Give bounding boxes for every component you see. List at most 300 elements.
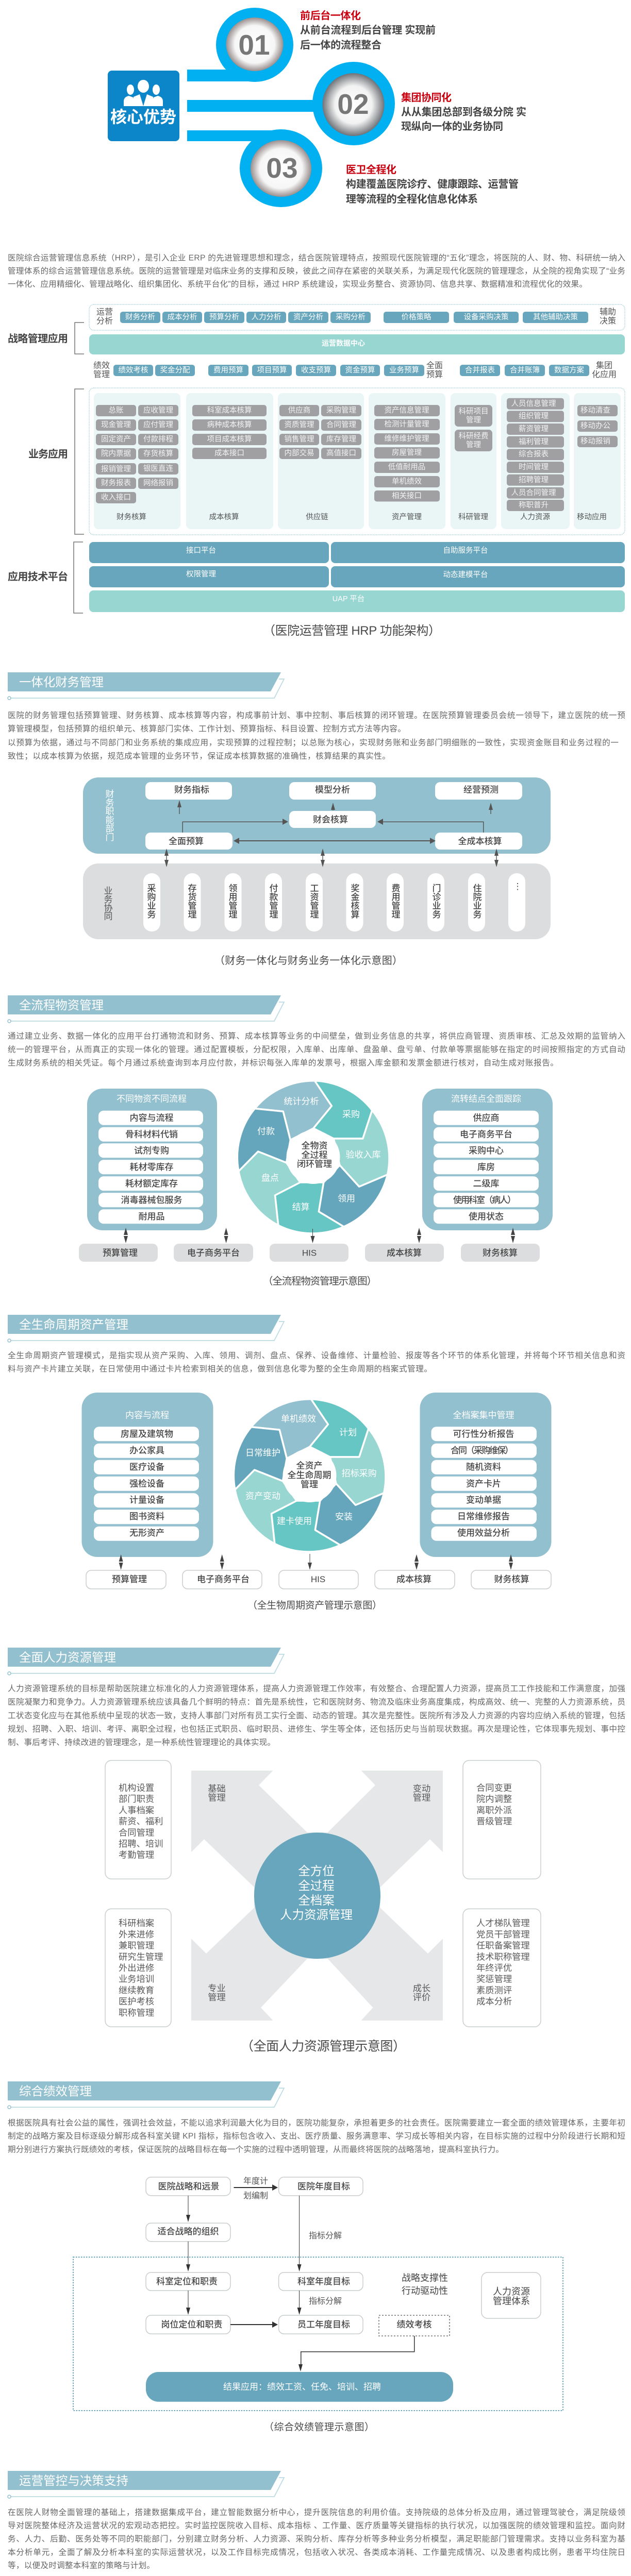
text: 集团协同化: 现纵向一体的业务协同 (401, 121, 503, 132)
label: support and drive: 行动驱动性 (402, 2286, 448, 2296)
item (98, 1111, 203, 1125)
button: 财务分析 (125, 313, 155, 321)
button: 采购分析 (336, 313, 366, 321)
box: top right list: 晋级管理 (476, 1816, 512, 1826)
system: 成本核算: 成本核算 (387, 1248, 422, 1258)
node: 员工年度目标 (279, 2315, 363, 2334)
system: 预算管理 (79, 1244, 158, 1262)
system: HIS: HIS (311, 1574, 325, 1584)
pill: 款 (269, 892, 278, 902)
button: 福利管理 (519, 437, 549, 446)
system: 电子商务平台 (182, 1570, 262, 1589)
item (94, 1493, 199, 1507)
box: bottom right list: 素质测评 (476, 1985, 512, 1995)
item: 耗材零库存 (130, 1162, 173, 1172)
heading: 全面人力资源管理: 全面人力资源管理 (19, 1651, 116, 1664)
panel: business collaboration: 务 (104, 894, 112, 905)
segment labels: 盘点 (261, 1173, 279, 1183)
pinwheel: asset lifecycle (234, 1399, 386, 1552)
button (138, 434, 178, 445)
hub (283, 1449, 336, 1502)
label: 辅助决策: 辅助 (600, 308, 616, 316)
button: 检测计量管理 (385, 420, 429, 429)
button: 存货核算 (143, 449, 173, 458)
box: bottom right list: 技术职称管理 (476, 1952, 530, 1962)
box: bottom left list: 继续教育 (119, 1985, 154, 1995)
column: 成本核算 (186, 393, 273, 529)
label: 集团化应用: 化应用 (592, 369, 617, 379)
button (577, 420, 618, 432)
pill: 务 (473, 910, 481, 920)
row: management groups (93, 361, 617, 379)
button: 收入接口 (101, 493, 131, 502)
button: 财务报表 (101, 479, 131, 487)
pill: 费 (392, 884, 400, 893)
button (374, 447, 440, 459)
label: 人力资源 (520, 513, 550, 521)
box: 财会核算 (313, 815, 348, 824)
label: 指标分解: 指标分解 (309, 2297, 342, 2306)
button: 资金预算 (345, 366, 375, 375)
button (507, 462, 564, 473)
button: 院内票据 (101, 449, 131, 458)
button: 移动办公 (580, 421, 610, 430)
pill: 管 (392, 901, 400, 911)
segment labels: 日常维护 (245, 1448, 280, 1458)
button (374, 476, 440, 487)
text block: decision support: 导对医院整体经济及运营状况的宏观动态把控。实时监控医院收入目标、成本指标 、工作量、医疗质量等关键指标的执行状况，以加强医院的绩效管理和监控。面向财 (8, 2520, 625, 2530)
pill: 用 (229, 892, 237, 902)
button: 移动报销 (580, 437, 610, 446)
text block: HRP intro: 一体化、应用精细化、管理战略化、组织集团化、系统平台化”的目标，通过 HRP 系统建设，实现业务整合、资源协同、信息共享、数据精准和流程优化的效果。 (8, 279, 587, 289)
pill (225, 873, 241, 931)
button (455, 430, 492, 451)
item (98, 1176, 203, 1191)
button: 固定资产 (101, 435, 131, 444)
item (98, 1209, 203, 1224)
label: 科研管理 (458, 513, 488, 521)
button: 网络报销 (143, 479, 173, 487)
heading: 全流程物资管理 (8, 995, 284, 1023)
panel: core advantages (108, 8, 526, 207)
button: 奖金分配 (160, 366, 190, 375)
button (374, 433, 440, 445)
button: 应付管理 (143, 420, 173, 429)
text block: decision support: 本分析单元，全面了解及分析本科室的实际运营状况，以及工作目标完成情况，包括收入状况、各类成本消耗、工作量完成情况、以及患者构成比例，患者平均住院日 (8, 2547, 625, 2557)
arm label: 专业管理: 专业 (208, 1983, 226, 1993)
button (374, 490, 440, 502)
text block: HR: 人力资源管理系统的目标是帮助医院建立标准化的人力资源管理体系，提高人力资源管理工作效率，有效整合、合理配置人力资源，提高员工工作技能和工作满意度，加强 (8, 1684, 625, 1693)
button (246, 312, 286, 323)
pill: 业 (432, 901, 441, 911)
item (434, 1143, 539, 1158)
label: application platform: 应用技术平台 (8, 570, 68, 583)
button (374, 419, 440, 430)
button: 相关接口 (392, 492, 422, 500)
pill: 工 (310, 884, 319, 893)
button: 人力分析 (252, 313, 281, 321)
button: 银医直连 (143, 464, 173, 473)
button (279, 434, 319, 445)
pill: ⋮ (513, 882, 522, 891)
item: 内容与流程 (130, 1113, 173, 1123)
button: 费用预算 (213, 366, 243, 375)
button: 总账 (108, 406, 124, 415)
text block: finance: 医院的财务管理包括预算管理、财务核算、成本核算等内容，构成事前计划、事中控制、事后核算的闭环管理。在医院预算管理委员会统一领导下，建立医院的统一预 (8, 710, 625, 720)
segment labels: 资产变动 (245, 1491, 280, 1501)
panel: 全档案集中管理 (420, 1393, 552, 1557)
item: 二级库 (473, 1179, 499, 1189)
panel: 全档案集中管理: 全档案集中管理 (453, 1411, 514, 1420)
pill: 管 (229, 901, 237, 911)
pill: 货 (188, 892, 197, 902)
node: 岗位定位和职责: 岗位定位和职责 (161, 2319, 223, 2330)
button: 房屋管理 (392, 448, 422, 457)
system: 电子商务平台 (174, 1244, 253, 1262)
box: 人力资源管理体系: 管理体系 (493, 2296, 530, 2307)
box: bottom left list: 外来进修 (119, 1929, 154, 1939)
item (434, 1111, 539, 1125)
platform: UAP (89, 590, 625, 612)
label: 运营分析: 运营 (96, 308, 113, 316)
button (455, 405, 492, 427)
text block: performance (8, 2117, 625, 2154)
system: 预算管理: 预算管理 (103, 1248, 138, 1258)
button (507, 449, 564, 460)
label: 供应链 (306, 512, 328, 521)
column: 科研管理 (451, 393, 496, 529)
item (98, 1127, 203, 1142)
button: 付款排程 (143, 435, 173, 444)
arm label: 成长评价: 成长 (413, 1983, 430, 1993)
button: 资质管理 (285, 420, 314, 429)
label: strategic management: 战略管理应用 (8, 332, 68, 345)
panel: finance departments: 职 (105, 807, 114, 817)
node: 适合战略的组织 (146, 2223, 230, 2242)
bar connectors (187, 70, 316, 141)
button (507, 398, 564, 410)
box: 人力资源管理体系 (481, 2273, 541, 2318)
chart: finance integration (83, 777, 551, 939)
segment labels: 采购 (342, 1110, 360, 1119)
pill: 门 (432, 884, 441, 893)
heading: 全生命周期资产管理: 全生命周期资产管理 (19, 1318, 128, 1331)
item (434, 1193, 539, 1207)
box: bottom left list: 业务培训 (119, 1974, 154, 1984)
button: 资产信息管理 (385, 406, 429, 415)
circle 03: 03 (266, 152, 298, 184)
label: 资产管理 (392, 513, 422, 521)
button (279, 405, 319, 416)
text block: decision support: 务、人力、后勤、医务处等不同的职能部门，分别建立财务分析、人力资源、采购分析、库存分析等多种业务分析模型，满足职能部门管理需求。支持以业务科室为基 (8, 2534, 625, 2544)
text: 集团协同化: 集团协同化 (401, 92, 452, 104)
system: HIS (270, 1244, 348, 1262)
item (431, 1493, 537, 1507)
chart: asset lifecycle (81, 1393, 552, 1589)
segment labels: 安装 (335, 1512, 353, 1522)
icon box: core advantages (108, 71, 179, 141)
system: HIS (279, 1570, 358, 1589)
panel: finance departments: 能 (105, 815, 114, 825)
label: 全面预算: 预算 (426, 369, 443, 379)
button (505, 365, 545, 376)
item: 耗材额定库存 (125, 1178, 178, 1189)
text block: assets: 料与资产卡片建立关联，在日常使用中通过卡片检索到相关的信息，做到信息化零为整的全生命周期的档案式管理。 (8, 1364, 432, 1374)
pill (346, 873, 363, 931)
hub: 全资产 (296, 1461, 323, 1470)
button: 薪资管理 (519, 425, 549, 433)
system: 成本核算: 成本核算 (396, 1574, 431, 1584)
box: 全面预算 (169, 836, 204, 846)
box: bottom right list: 年终评优 (476, 1963, 512, 1973)
box: 人力资源管理体系: 人力资源 (493, 2286, 530, 2297)
item (94, 1477, 199, 1491)
box: bottom left list: 医护考核 (119, 1996, 154, 2007)
box: bottom left list (105, 1909, 171, 2027)
label: 年度计划编制: 划编制 (243, 2191, 268, 2200)
button: 合并报表 (465, 366, 495, 375)
panel: 内容与流程: 内容与流程 (125, 1411, 169, 1420)
segment labels: 验收入库 (346, 1150, 381, 1160)
button (296, 365, 336, 376)
button (138, 463, 178, 474)
text block: HR: 制、事后考评、持续改进的管理理念，是一种系统性管理理论的具体实现。 (8, 1737, 275, 1747)
centre circle: 全过程 (298, 1879, 335, 1892)
button (507, 500, 564, 511)
button: 业务预算 (389, 366, 419, 375)
button (113, 365, 153, 376)
pill: 购 (147, 892, 156, 902)
box: top left list: 考勤管理 (119, 1850, 154, 1860)
text block: assets: 全生命周期资产管理模式，是指实现从资产采购、入库、领用、调剂、盘点、保养、设备维修、计量检验、报废等各个环节的体系化管理，并将每个环节相关信息和资 (8, 1350, 625, 1360)
panel: finance departments: 务 (105, 798, 114, 808)
node: 医院年度目标 (279, 2177, 363, 2196)
item: 库房 (477, 1162, 495, 1172)
text block: HRP intro (8, 252, 625, 289)
caption: performance: （综合效绩管理示意图） (264, 2421, 374, 2433)
item (94, 1444, 199, 1458)
column: 资产管理 (369, 393, 445, 529)
node: 科室年度目标 (279, 2273, 363, 2291)
arm label: 变动管理: 变动 (413, 1784, 430, 1794)
button: 维修维护管理 (385, 434, 429, 443)
pill: 住 (473, 884, 481, 893)
panel: business collaboration (83, 863, 551, 939)
button: 成本接口 (214, 449, 244, 457)
button: 科研项目 (459, 408, 489, 416)
node: 绩效考核 (379, 2315, 450, 2336)
item (434, 1127, 539, 1142)
text block: decision support: 在医院人财物全面管理的基础上，搭建数据集成平台，建立智能数据分析中心，提升医院信息的利用价值。支持院级的总体分析及应用，通过管理驾驶仓，满足院级领 (8, 2507, 625, 2517)
item (94, 1427, 199, 1441)
system: 财务核算 (471, 1570, 551, 1589)
platform: 动态建模平台: 动态建模平台 (443, 570, 488, 579)
button: 应收管理 (143, 405, 173, 415)
panel: finance departments: 部 (105, 824, 114, 834)
item: 耐用品 (138, 1212, 165, 1222)
panel: finance departments: 门 (105, 833, 114, 842)
shape: gray X arms (191, 1771, 443, 2021)
button: 资产分析 (293, 313, 323, 321)
button: 综合报表 (519, 450, 549, 459)
arm label: 基础管理: 管理 (208, 1792, 226, 1803)
label: 绩效管理: 管理 (93, 370, 110, 379)
text block: HR: 规划、招聘、入职、培训、考评、离职全过程，也包括正式职员、临时职员、进修生、学生等全体，还包括历史与当前现状数据。再次是理论性，它体现事先规划、事中控 (8, 1724, 625, 1734)
heading: core advantages: 核心优势 (110, 108, 176, 126)
button: 组织管理 (519, 412, 549, 420)
heading: 全生命周期资产管理 (8, 1315, 284, 1342)
text: 医卫全程化: 理等流程的全程化信息化体系 (346, 193, 478, 205)
item: 电子商务平台 (460, 1129, 512, 1140)
text block: decision support (8, 2507, 625, 2570)
box: bottom left list: 科研档案 (119, 1918, 154, 1928)
column: 供应链 (278, 393, 364, 529)
system: 预算管理: 预算管理 (112, 1574, 147, 1584)
item: 骨科材料代销 (125, 1129, 178, 1140)
arm label: 专业管理: 管理 (208, 1992, 226, 2002)
item: 日常维修报告 (457, 1512, 510, 1521)
button: 数据方案 (554, 365, 584, 375)
text block: HR (8, 1684, 625, 1747)
item: 资产卡片 (466, 1479, 501, 1489)
pill: 诊 (432, 892, 441, 902)
button (96, 478, 136, 489)
button (460, 365, 500, 376)
box: bottom left list: 兼职管理 (119, 1940, 154, 1951)
button: 单机绩效 (392, 477, 422, 486)
node: 绩效考核: 绩效考核 (397, 2319, 432, 2330)
text: 前后台一体化: 前后台一体化 (300, 9, 361, 22)
segment labels: 付款 (257, 1126, 275, 1137)
pinwheel: material lifecycle (237, 1081, 389, 1233)
button (507, 487, 564, 499)
item: 变动单据 (466, 1495, 501, 1505)
dashed frame (73, 2257, 563, 2411)
caption: HRP architecture: （医院运营管理 HRP 功能架构） (263, 624, 441, 638)
button: 现金管理 (101, 420, 131, 429)
button (279, 448, 319, 459)
text block: performance: 期分别进行方案执行既绩效的考核，保证医院的战略目标在每一个实施的过程中透明管理，从而最终将医院的战略落地，提高科室执行力。 (8, 2144, 504, 2154)
text block: HRP intro: 医院综合运营管理信息系统（HRP），是引入企业 ERP 的先进管理思想和理念，结合医院管理特点，按照现代医院管理的“五化”理念，将医院的人、财、物、科研统一纳入 (8, 252, 625, 263)
pill (427, 873, 444, 931)
segment labels (257, 1096, 381, 1212)
box: top right list (463, 1760, 541, 1879)
label: 绩效管理: 绩效 (93, 362, 110, 370)
box: top left list: 招聘、培训 (119, 1838, 163, 1849)
button (204, 312, 244, 323)
item: 试剂专购 (134, 1146, 169, 1156)
button (279, 419, 319, 431)
box: top left list (105, 1760, 171, 1879)
button: 称职普升 (519, 501, 549, 510)
segment labels: 统计分析 (284, 1096, 319, 1107)
button (507, 423, 564, 435)
pill (265, 873, 282, 931)
heading: 全面人力资源管理 (8, 1648, 284, 1675)
pill (143, 873, 160, 931)
item: 使用科室（病人） (453, 1195, 516, 1205)
heading: 综合绩效管理: 综合绩效管理 (19, 2084, 92, 2098)
button (96, 434, 136, 445)
button: 管理 (466, 440, 481, 449)
box (435, 782, 522, 800)
platform: 自助服务平台: 自助服务平台 (443, 546, 488, 555)
pill: 用 (392, 892, 400, 902)
pill: 算 (351, 910, 360, 920)
caption: finance: （财务一体化与财务业务一体化示意图） (214, 955, 403, 967)
centre circle: 人力资源管理 (280, 1908, 353, 1922)
caption: HR: （全面人力资源管理示意图） (241, 2039, 406, 2054)
circle 03 (240, 129, 322, 207)
bar: operations data centre: 运营数据中心 (322, 339, 365, 347)
arm label: 成长评价: 评价 (413, 1992, 430, 2002)
pill: 理 (269, 910, 278, 920)
node: 员工年度目标: 员工年度目标 (297, 2319, 350, 2330)
chart: performance flow (73, 2176, 563, 2411)
column: 财务核算 (94, 393, 180, 529)
item (434, 1209, 539, 1224)
hub: 管理 (301, 1480, 318, 1489)
button: 招聘管理 (519, 476, 549, 484)
item: 强检设备 (129, 1479, 164, 1489)
button (96, 405, 136, 416)
box: top right list: 离职外派 (476, 1805, 512, 1815)
item: 采购中心 (469, 1146, 504, 1156)
box (145, 833, 233, 850)
item (431, 1510, 537, 1524)
platform: 动态建模平台 (331, 566, 625, 587)
column: 移动应用 (574, 393, 621, 529)
arrows (186, 2184, 414, 2371)
text block: finance: 以预算为依据，通过与不同部门和业务系统的集成应用，实现预算的过程控制；以总账为核心，实现财务账和业务部门明细账的一致性，实现资金账目和业务过程的一 (8, 738, 619, 747)
panel: finance departments: 财 (105, 789, 114, 799)
pill: 管 (188, 901, 197, 911)
box: bottom left list: 职称管理 (119, 2007, 154, 2018)
caption: materials: （全流程物资管理示意图） (263, 1276, 377, 1287)
button (384, 365, 424, 376)
button (321, 419, 361, 431)
button (252, 365, 292, 376)
segment labels: 单机绩效 (281, 1414, 316, 1424)
text block: materials (8, 1031, 625, 1067)
item (98, 1160, 203, 1174)
text block: materials: 通过建立业务、数据一体化的应用平台打通物流和财务、预算、成本核算等业务的中间壁垒，做到业务信息的共享，将供应商管理、资质审核、汇总及效期的监管纳入 (8, 1031, 625, 1041)
box (289, 782, 376, 800)
node: result application: 结果应用：绩效工资、任免、培训、招聘 (223, 2382, 381, 2392)
arm label: 基础管理: 基础 (208, 1784, 226, 1794)
item (431, 1444, 537, 1458)
panel: business collaboration: 同 (104, 912, 112, 921)
button (96, 419, 136, 431)
heading: 全流程物资管理: 全流程物资管理 (19, 998, 104, 1012)
caption: assets: （全生物周期资产管理示意图） (247, 1600, 382, 1611)
text: 医卫全程化 (346, 163, 519, 205)
arrows to systems (124, 1228, 515, 1243)
item (431, 1477, 537, 1491)
system: 预算管理 (86, 1570, 166, 1589)
box: top left list: 人事档案 (119, 1805, 154, 1815)
text: 集团协同化: 从从集团总部到各级分院 实 (401, 106, 526, 118)
button (138, 419, 178, 431)
pill: 核 (351, 901, 360, 911)
panel: business collaboration: 协 (104, 903, 112, 913)
button (577, 405, 618, 416)
button (192, 419, 267, 431)
pill: 理 (392, 910, 400, 920)
label: 集团化应用: 集团 (596, 362, 612, 370)
item: 使用状态 (469, 1212, 504, 1222)
label: 成本核算 (209, 513, 239, 521)
